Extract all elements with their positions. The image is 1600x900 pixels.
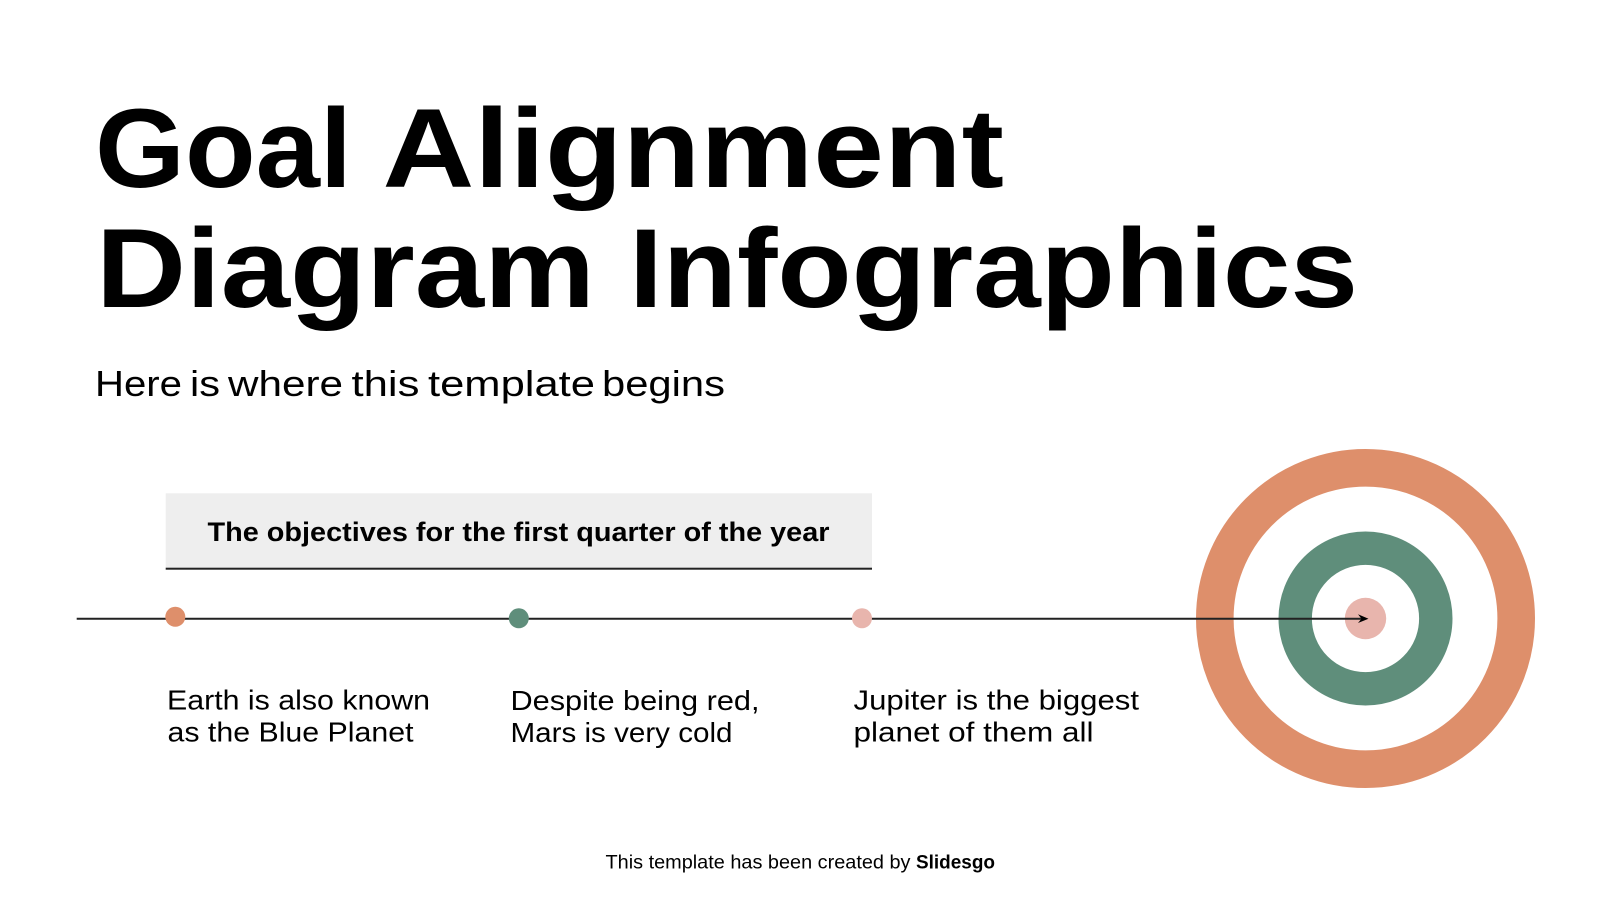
text: Earth: as the Blue Planet (168, 717, 414, 748)
objectives banner: The objectives for the first quarter of the year (208, 517, 830, 547)
title: Goal (95, 86, 352, 211)
title: Alignment (382, 86, 1004, 211)
title: Infographics (629, 206, 1358, 331)
title: Diagram (96, 206, 595, 331)
objectives banner (166, 493, 872, 570)
text: Mars: Mars is very cold (510, 717, 732, 748)
marker: orange dot (165, 607, 185, 627)
text: Mars (510, 685, 760, 748)
footer credit: This template has been created by (606, 851, 911, 873)
marker: green dot (509, 608, 529, 628)
text: Jupiter: planet of them all (854, 717, 1094, 748)
subtitle (95, 363, 725, 404)
footer credit: Slidesgo (916, 851, 995, 873)
subtitle: where (227, 363, 343, 404)
subtitle: is (190, 363, 220, 404)
subtitle: begins (602, 363, 725, 404)
target rings (1215, 468, 1516, 769)
text: Jupiter (854, 685, 1139, 748)
text: Earth (167, 685, 430, 748)
subtitle: template (428, 363, 595, 404)
marker: pink dot (852, 608, 872, 628)
subtitle: Here (95, 363, 182, 404)
text: Earth: Earth is also known (167, 685, 430, 716)
title (95, 86, 1358, 331)
subtitle: this (352, 363, 420, 404)
text: Mars: Despite being red, (510, 685, 760, 716)
timeline arrow (77, 614, 1369, 623)
text: Jupiter: Jupiter is the biggest (854, 685, 1139, 716)
